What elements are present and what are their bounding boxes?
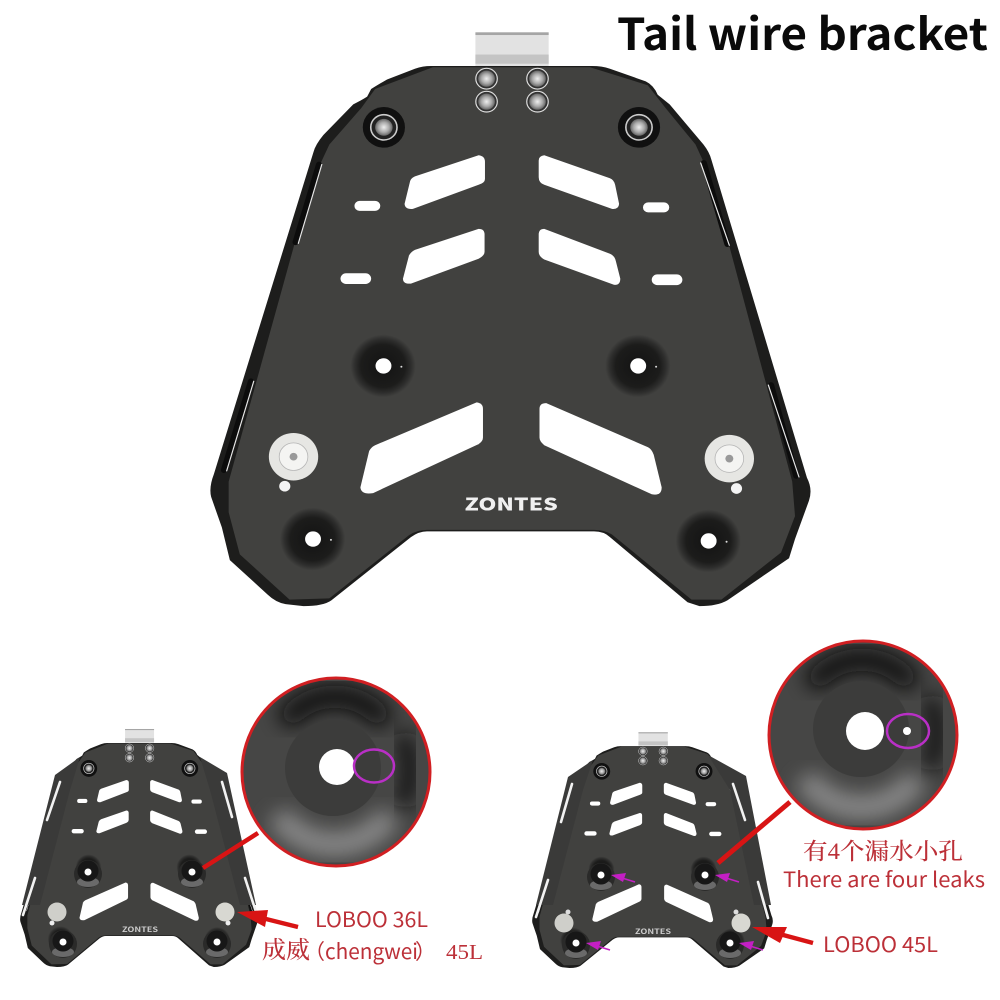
label: There are four leaks: There are four leaks: [783, 864, 985, 894]
small bracket: left: [20, 729, 258, 967]
red arrow: right: [752, 927, 813, 943]
label: LOBOO 36L: LOBOO 36L: [315, 904, 428, 934]
right shoulders: [536, 755, 771, 905]
leak hole: [903, 727, 911, 735]
label: chengwei 45L: 成威: [262, 930, 310, 965]
mounting wells: [280, 335, 741, 572]
purple marker: [354, 750, 394, 782]
brand logo: ZONTES: [465, 491, 558, 516]
plate body: [210, 66, 811, 606]
left washers: [48, 902, 234, 926]
magenta pointer arrows: [586, 873, 763, 950]
drain hole: [846, 712, 884, 750]
leader line: left: [203, 833, 258, 868]
label: chengwei 45L: ）: [415, 936, 436, 966]
purple marker: [887, 714, 929, 748]
left shoulders: [22, 757, 256, 905]
label: chengwei 45L: 45L: [446, 940, 483, 964]
left wells: [49, 860, 231, 958]
small bracket: right: [532, 732, 773, 968]
title: Tail wire bracket: [617, 0, 988, 63]
bracket tab: [475, 32, 549, 66]
washers: [269, 433, 754, 494]
right wells: [562, 863, 744, 959]
top bolts: [363, 68, 660, 148]
red arrow: left: [237, 910, 298, 927]
side rails: [224, 163, 799, 477]
label: Chinese leaks note: 有4个漏水小孔: [803, 839, 963, 864]
label: chengwei 45L: [262, 930, 483, 966]
left side rails: [23, 782, 257, 915]
left brand logo: ZONTES: [122, 925, 159, 935]
drain hole: [319, 749, 355, 785]
right washers: [554, 910, 750, 932]
zoom callout: left: [242, 678, 430, 866]
right side rails: [536, 784, 768, 918]
label: chengwei 45L: chengwei: [325, 936, 418, 966]
main bracket plate: [210, 32, 811, 606]
label: chengwei 45L: （: [304, 936, 325, 966]
cut-out slots: [340, 155, 682, 495]
label: LOBOO 45L: LOBOO 45L: [823, 929, 938, 959]
leader line: right: [718, 802, 790, 863]
right brand logo: ZONTES: [635, 927, 672, 937]
zoom callout: right: [769, 641, 957, 829]
